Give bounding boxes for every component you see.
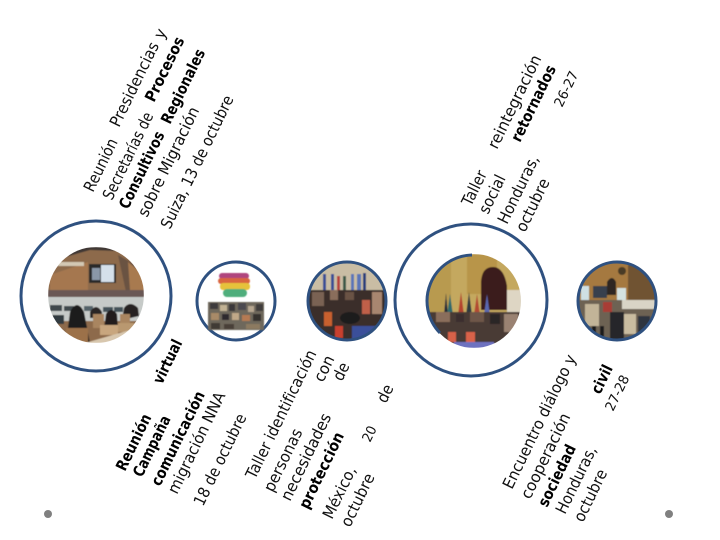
text block: Reunión Presidencias y Secretarías de Procesos Consultivos Regionales: Presidencias xyxy=(106,39,163,130)
text block: Encuentro diálogo y cooperación sociedad civil: Encuentro diálogo y xyxy=(499,351,580,492)
text block: Taller social reintegración retornados: social xyxy=(475,172,510,217)
text block: Reunión Campaña comunicación migración NNA: Reunión xyxy=(112,411,155,474)
text block: Encuentro diálogo y cooperación sociedad civil xyxy=(499,351,633,525)
text block: Taller social reintegración retornados: octubre xyxy=(512,175,554,235)
node 1: conference hall photo in large ring xyxy=(21,221,171,371)
text block: Encuentro diálogo y cooperación sociedad civil: 27-28 xyxy=(602,373,633,414)
node 2: campaign logo and photo collage in small ring xyxy=(197,262,275,340)
text block: Reunión Campaña comunicación migración NNA: Campaña xyxy=(129,413,175,480)
text block: Encuentro diálogo y cooperación sociedad civil: cooperación xyxy=(517,410,574,502)
text block: Taller social reintegración retornados: Taller xyxy=(457,167,491,210)
text block: Reunión Campaña comunicación migración NNA xyxy=(112,337,250,509)
text block: Taller social reintegración retornados xyxy=(457,52,582,235)
text block: Encuentro diálogo y cooperación sociedad civil: octubre xyxy=(570,466,611,525)
text block: Taller identificación de personas con necesidades de protección: personas xyxy=(260,425,306,495)
text block: Reunión Presidencias y Secretarías de Procesos Consultivos Regionales: Regionales xyxy=(157,46,209,127)
text block: Taller identificación de personas con necesidades de protección: de xyxy=(329,359,353,384)
text block: Encuentro diálogo y cooperación sociedad civil: sociedad xyxy=(534,442,580,510)
text block: Taller social reintegración retornados: retornados xyxy=(507,62,560,145)
text block: Reunión Presidencias y Secretarías de Procesos Consultivos Regionales: Consultivos xyxy=(115,128,168,212)
text block: Reunión Presidencias y Secretarías de Procesos Consultivos Regionales: y xyxy=(150,25,171,42)
text block: Taller identificación de personas con necesidades de protección: necesidades xyxy=(277,410,335,504)
text block: Reunión Presidencias y Secretarías de Procesos Consultivos Regionales: sobre Migración xyxy=(134,104,203,220)
text block: Reunión Presidencias y Secretarías de Procesos Consultivos Regionales: Reunión xyxy=(80,135,122,195)
text block: Taller identificación de personas con necesidades de protección: 20 xyxy=(359,423,381,445)
text block: Encuentro diálogo y cooperación sociedad civil: Honduras, xyxy=(552,443,601,517)
text block: Taller identificación de personas con necesidades de protección: de xyxy=(373,381,397,406)
text block: Taller identificación de personas con necesidades de protección: protección xyxy=(295,429,348,512)
left timeline dot xyxy=(44,510,52,518)
node 3: group photo with flags in small ring xyxy=(307,261,387,342)
text block: Reunión Presidencias y Secretarías de Procesos Consultivos Regionales: Suiza, 13 de octubre xyxy=(157,92,238,232)
text block: Taller identificación de personas con necesidades de protección: Taller identificación xyxy=(241,347,320,483)
text block: Reunión Presidencias y Secretarías de Procesos Consultivos Regionales: Secretarías de xyxy=(99,109,157,203)
text block: Reunión Campaña comunicación migración NNA: 18 de octubre xyxy=(190,411,250,509)
text block: Taller social reintegración retornados: Honduras, xyxy=(494,152,543,227)
node 5: meeting hall photo in small ring xyxy=(577,261,657,341)
text block: Reunión Campaña comunicación migración NNA: migración NNA xyxy=(164,389,229,497)
text block: Reunión Campaña comunicación migración NNA: comunicación xyxy=(147,388,209,489)
text block: Reunión Presidencias y Secretarías de Procesos Consultivos Regionales: Procesos xyxy=(141,34,188,105)
text block: Taller identificación de personas con necesidades de protección: octubre xyxy=(337,470,379,530)
text block: Encuentro diálogo y cooperación sociedad civil: civil xyxy=(587,362,617,397)
text block: Taller identificación de personas con necesidades de protección: México, xyxy=(319,463,360,522)
text block: Taller social reintegración retornados: reintegración xyxy=(484,52,545,152)
text block: Reunión Campaña comunicación migración NNA: virtual xyxy=(149,337,186,387)
text block: Taller identificación de personas con necesidades de protección: con xyxy=(310,352,338,385)
text block: Taller social reintegración retornados: 26-27 xyxy=(551,69,582,110)
right timeline dot xyxy=(665,510,673,518)
text block: Reunión Presidencias y Secretarías de Procesos Consultivos Regionales xyxy=(80,25,238,232)
text block: Taller identificación de personas con necesidades de protección xyxy=(241,347,397,530)
node 4: group photo with flags inside double ring xyxy=(395,224,547,376)
